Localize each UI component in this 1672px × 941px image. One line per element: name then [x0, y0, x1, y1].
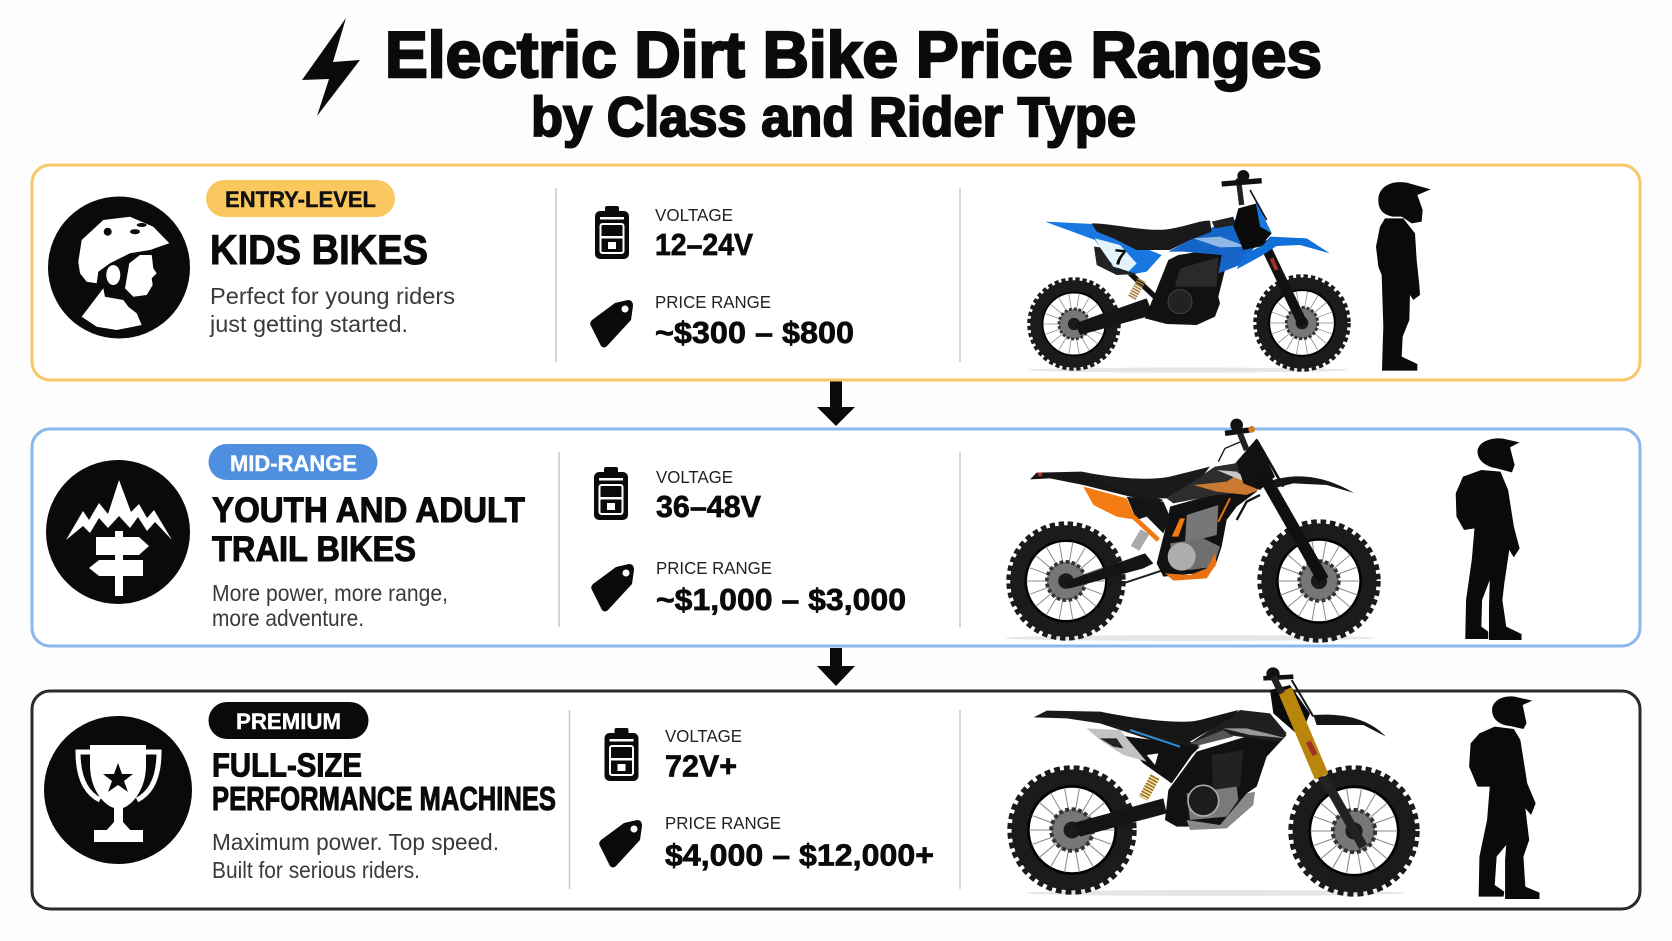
bike: kids blue electric dirt bike: 7: [1113, 244, 1127, 270]
badge: premium: PREMIUM: [236, 709, 341, 734]
price range: PRICE RANGE: [655, 292, 771, 312]
icon: mountain and signpost: [46, 460, 190, 604]
description: just getting started.: [209, 311, 408, 337]
description: more adventure.: [212, 605, 364, 631]
voltage: VOLTAGE: [665, 726, 742, 746]
heading: YOUTH AND ADULT: [212, 491, 525, 530]
voltage: [656, 467, 761, 524]
icon: price tag: [599, 820, 642, 868]
icon: battery: [604, 728, 638, 781]
icon: battery: [595, 206, 629, 259]
heading: [212, 748, 556, 818]
icon: child helmet: [48, 196, 190, 338]
icon: battery: [594, 467, 628, 520]
description: [209, 283, 455, 337]
badge: mid-range: [208, 444, 378, 480]
description: Built for serious riders.: [212, 857, 420, 883]
bike: kids blue electric dirt bike: [1028, 170, 1349, 372]
voltage: VOLTAGE: [656, 467, 733, 487]
arrow: kids to trail: [817, 381, 855, 426]
badge: entry-level: ENTRY-LEVEL: [225, 187, 376, 212]
icon: trophy: [44, 716, 192, 864]
description: [212, 580, 448, 631]
icon: price tag: [590, 300, 633, 348]
heading: TRAIL BIKES: [212, 530, 416, 569]
price range: [656, 558, 906, 617]
bike: premium black electric dirt bike: [1010, 667, 1417, 896]
rider silhouette: adult with backpack: [1469, 696, 1540, 899]
price range: $4,000 – $12,000+: [665, 838, 934, 872]
rider silhouette: child: [1376, 182, 1431, 371]
panel: performance machines: [32, 691, 1640, 909]
price range: [665, 813, 934, 872]
price range: ~$300 – $800: [655, 315, 854, 350]
voltage: 72V+: [665, 748, 737, 784]
icon: price tag: [591, 564, 634, 612]
price range: PRICE RANGE: [656, 558, 772, 578]
price range: PRICE RANGE: [665, 813, 781, 833]
icon: lightning bolt: [302, 18, 360, 116]
voltage: 12–24V: [655, 227, 753, 262]
voltage: [655, 205, 753, 262]
title: by Class and Rider Type: [531, 85, 1136, 148]
badge: entry-level: [206, 180, 395, 217]
badge: premium: [208, 702, 368, 739]
heading: FULL-SIZE: [212, 748, 362, 784]
voltage: [665, 726, 742, 784]
heading: PERFORMANCE MACHINES: [212, 781, 556, 818]
voltage: VOLTAGE: [655, 205, 733, 225]
price range: ~$1,000 – $3,000: [656, 582, 906, 617]
description: More power, more range,: [212, 580, 448, 606]
voltage: 36–48V: [656, 489, 761, 524]
price range: [655, 292, 854, 350]
rider silhouette: teen with backpack: [1456, 438, 1522, 640]
title: [385, 18, 1322, 148]
heading: [212, 491, 525, 569]
bike: trail orange electric dirt bike: [1005, 419, 1378, 641]
panel: kids bikes: [32, 165, 1640, 380]
badge: mid-range: MID-RANGE: [230, 451, 357, 476]
description: [212, 829, 499, 883]
heading: KIDS BIKES: [210, 226, 428, 273]
title: Electric Dirt Bike Price Ranges: [385, 18, 1322, 91]
panel: trail bikes: [32, 429, 1640, 646]
arrow: trail to premium: [817, 648, 855, 686]
description: Perfect for young riders: [210, 283, 455, 309]
description: Maximum power. Top speed.: [212, 829, 499, 855]
